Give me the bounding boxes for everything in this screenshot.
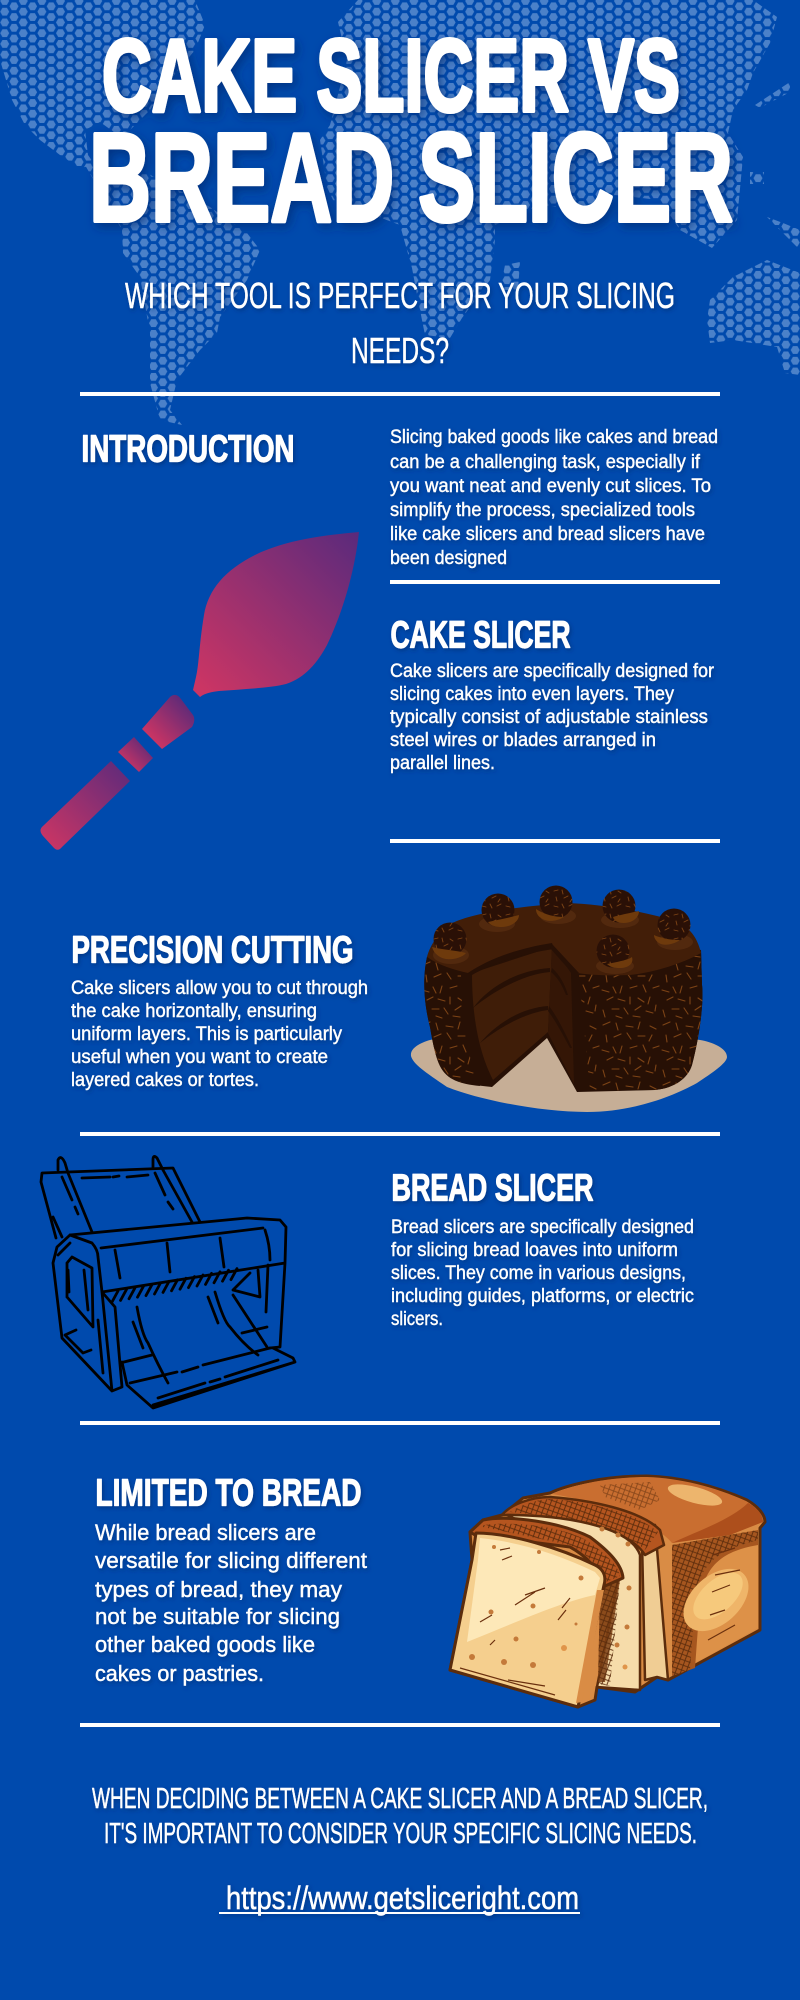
text: introduction: you want neat and evenly cut slices. To — [390, 475, 711, 497]
world map hexagon pattern — [0, 0, 800, 430]
text: bread slicer — [391, 1216, 694, 1330]
text: cake slicer: parallel lines. — [390, 752, 495, 774]
loaf top crust — [552, 1477, 763, 1543]
heading: precision cutting: PRECISION CUTTING — [72, 930, 354, 972]
text: cake slicer: slicing cakes into even layers. They — [390, 683, 674, 705]
text: cake slicer — [390, 660, 714, 774]
illustration: chocolate cake — [411, 886, 727, 1112]
illustration: bread slicer machine — [41, 1156, 295, 1408]
text: limited to bread: cakes or pastries. — [95, 1661, 264, 1686]
heading: cake slicer: CAKE SLICER — [390, 614, 570, 656]
heading: limited to bread: LIMITED TO BREAD — [96, 1472, 362, 1514]
text: bread slicer: including guides, platforms, or electric — [391, 1285, 694, 1307]
loaf side highlight — [672, 1530, 758, 1676]
cake right side — [579, 950, 703, 1091]
cake top — [427, 903, 701, 975]
front slice crust — [470, 1518, 623, 1586]
text: precision cutting: Cake slicers allow you to cut through — [71, 977, 368, 999]
text: precision cutting: the cake horizontally, ensuring — [71, 1000, 317, 1022]
loaf silhouette — [450, 1476, 765, 1707]
text: cake slicer: typically consist of adjustable stainless — [390, 706, 708, 728]
text: introduction: simplify the process, specialized tools — [390, 499, 695, 521]
text: cake slicer: Cake slicers are specifically designed for — [390, 660, 714, 682]
subtitle: NEEDS? — [351, 330, 449, 371]
text: cake slicer: steel wires or blades arranged in — [390, 729, 656, 751]
truffles — [434, 922, 466, 956]
heading: bread slicer: BREAD SLICER — [392, 1168, 594, 1210]
text: bread slicer: Bread slicers are specifically designed — [391, 1216, 694, 1238]
text: limited to bread: versatile for slicing different — [95, 1548, 367, 1573]
text: bread slicer: for slicing bread loaves into uniform — [391, 1239, 678, 1261]
website link: https://www.getsliceright.com — [226, 1880, 579, 1916]
text: introduction: been designed — [390, 547, 507, 569]
subtitle — [125, 275, 675, 371]
text: introduction: like cake slicers and bread slicers have — [390, 523, 705, 545]
text: limited to bread: not be suitable for slicing — [95, 1604, 340, 1629]
text: introduction: can be a challenging task, especially if — [390, 451, 701, 473]
text: limited to bread: other baked goods like — [95, 1632, 315, 1657]
text: limited to bread — [95, 1520, 367, 1686]
heading: introduction: INTRODUCTION — [82, 428, 294, 470]
cut face — [472, 947, 552, 1080]
plate — [411, 1025, 727, 1112]
text: introduction — [390, 426, 718, 569]
text: precision cutting — [71, 977, 368, 1091]
icon: cake slicer tool — [40, 532, 359, 850]
text: bread slicer: slices. They come in various designs, — [391, 1262, 686, 1284]
text: limited to bread: While bread slicers are — [95, 1520, 316, 1545]
illustration: sliced bread loaf — [450, 1476, 765, 1707]
text: precision cutting: layered cakes or tortes. — [71, 1069, 259, 1091]
text: precision cutting: useful when you want to create — [71, 1046, 328, 1068]
text: limited to bread: types of bread, they may — [95, 1577, 342, 1602]
text: introduction: Slicing baked goods like cakes and bread — [390, 426, 718, 448]
middle slices — [642, 1525, 668, 1680]
cream shadows — [433, 946, 469, 964]
conclusion text — [92, 1783, 708, 1850]
text: bread slicer: slicers. — [391, 1308, 443, 1330]
cream highlights — [432, 947, 466, 959]
text: precision cutting: uniform layers. This is particularly — [71, 1023, 342, 1045]
front slice face — [450, 1533, 605, 1707]
title — [89, 18, 733, 248]
cake left side — [424, 957, 480, 1086]
cake dark silhouette — [424, 930, 703, 1092]
